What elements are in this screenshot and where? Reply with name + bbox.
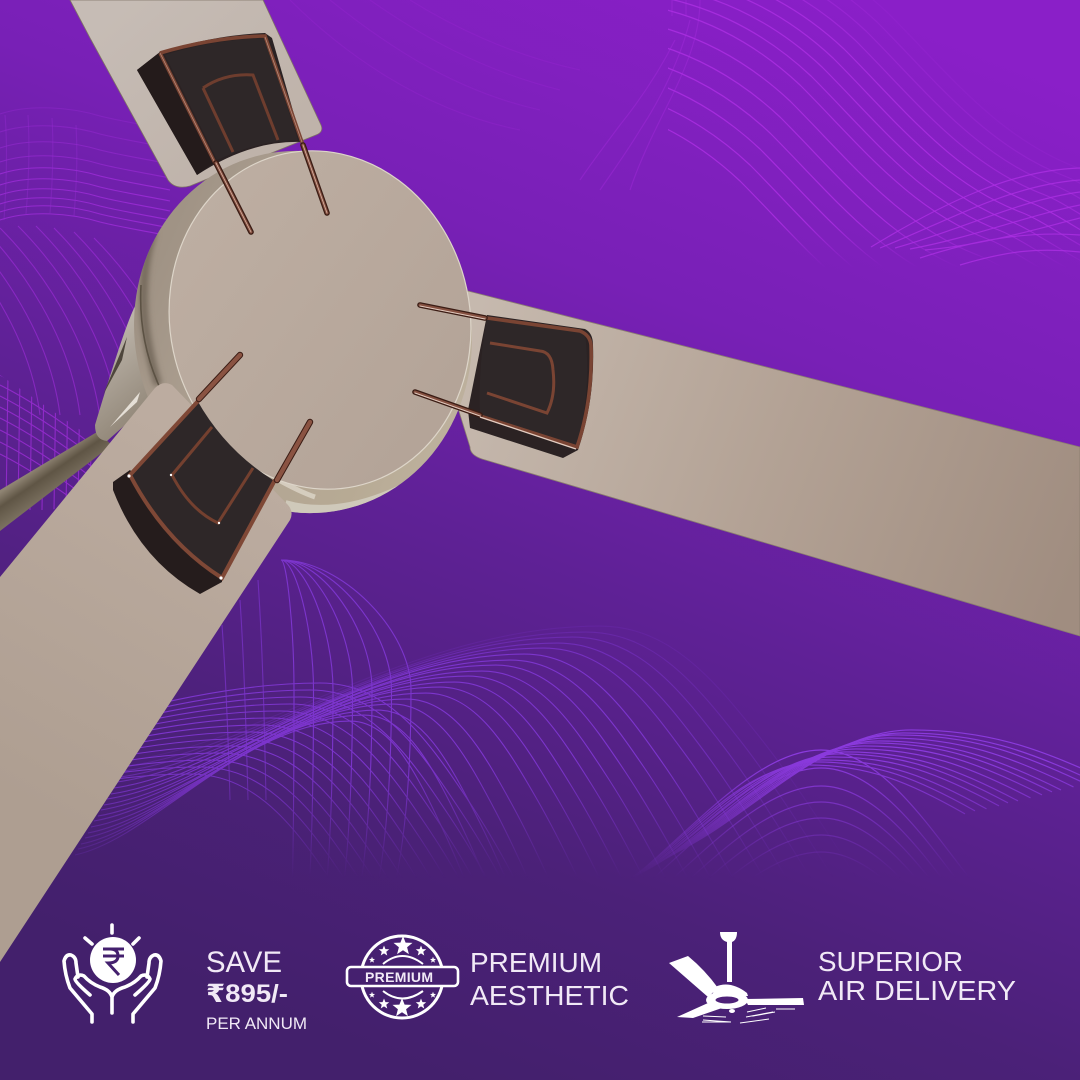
top blade bbox=[70, 0, 322, 187]
premium text: PREMIUM bbox=[470, 947, 602, 978]
lower left blade bbox=[0, 383, 292, 962]
premium text bbox=[470, 947, 629, 1011]
air delivery text: AIR DELIVERY bbox=[818, 975, 1016, 1006]
savings text: ₹895/- bbox=[206, 980, 288, 1008]
fan canopy bbox=[95, 303, 170, 441]
clip: right blade bbox=[415, 305, 593, 458]
icon: hands holding rupee coin bbox=[64, 925, 161, 1022]
air delivery text: SUPERIOR bbox=[818, 946, 963, 977]
savings text bbox=[206, 946, 307, 1033]
air delivery text bbox=[818, 946, 1016, 1006]
wave pattern: top right bbox=[348, 0, 1080, 266]
premium text: AESTHETIC bbox=[470, 980, 629, 1011]
feature: premium aesthetic bbox=[347, 936, 629, 1018]
feature: superior air delivery bbox=[669, 932, 1016, 1023]
icon: ceiling fan bbox=[669, 932, 804, 1023]
clip: lower left blade bbox=[113, 355, 310, 594]
wave pattern: lower centre and left bbox=[75, 560, 808, 866]
icon: premium badge: PREMIUM bbox=[365, 969, 433, 985]
hub outer rim bbox=[134, 150, 472, 514]
wave pattern: lower right bbox=[646, 729, 1080, 868]
hub centre disc bbox=[138, 123, 502, 517]
savings text: PER ANNUM bbox=[206, 1014, 307, 1033]
icon: premium badge bbox=[347, 936, 458, 1018]
fan down rod bbox=[0, 432, 112, 531]
feature: savings bbox=[64, 925, 307, 1033]
wave pattern: left side bbox=[0, 108, 170, 510]
savings text: SAVE bbox=[206, 946, 282, 979]
right blade bbox=[440, 291, 1080, 636]
clip: top blade bbox=[137, 33, 327, 232]
